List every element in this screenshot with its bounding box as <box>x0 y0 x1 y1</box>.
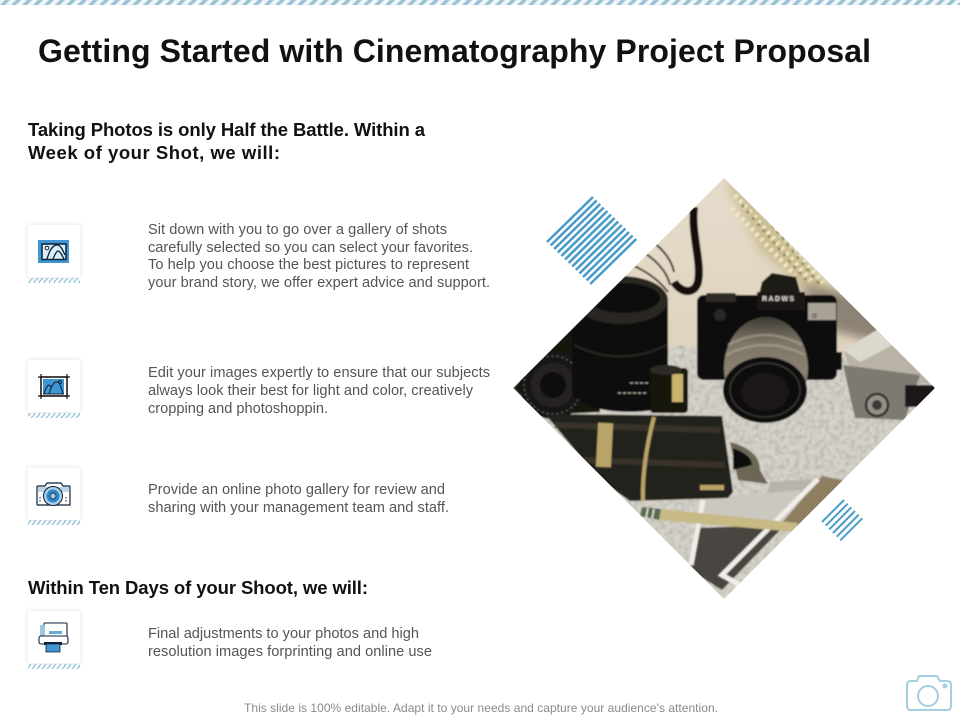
item 2 card with crop icon <box>28 360 80 418</box>
film canister <box>650 365 688 413</box>
photo prints <box>690 476 852 590</box>
item 2 text: Edit your images expertly to ensure that our subjects <box>148 365 490 381</box>
heading: first week <box>28 119 426 163</box>
grey shadow right top <box>799 280 884 343</box>
item 2 text: always look their best for light and color, creatively <box>148 383 474 399</box>
item 1 text: carefully selected so you can select your favorites. <box>148 240 473 256</box>
map surface <box>518 344 932 599</box>
dark left edge <box>513 328 601 414</box>
item 2 text <box>148 365 490 417</box>
striped diamond large <box>547 197 636 284</box>
item 4 text <box>148 626 432 660</box>
footer note: This slide is 100% editable. Adapt it to your needs and capture your audience's attention. <box>244 701 718 715</box>
item 3 card with camera icon <box>28 468 80 525</box>
icon: camera watermark <box>907 676 951 710</box>
pencil <box>640 507 798 532</box>
large upright lens <box>572 276 668 412</box>
heading: first week: Taking Photos is only Half the Battle. Within a <box>28 119 426 140</box>
item 1 text: To help you choose the best pictures to represent <box>148 257 469 273</box>
camera lens <box>723 317 808 423</box>
item 3 text <box>148 482 449 516</box>
icon: printer <box>39 623 68 652</box>
heading: first week: Week of your Shot, we will: <box>28 142 280 163</box>
striped diamond small <box>822 500 862 540</box>
black strap <box>674 207 699 291</box>
main camera body: α <box>812 311 817 320</box>
icon: crop frame <box>38 374 70 399</box>
main camera body: RADWS <box>762 296 794 303</box>
wicker backdrop <box>724 178 840 300</box>
item 3 text: Provide an online photo gallery for review and <box>148 482 445 498</box>
icon: picture <box>38 240 69 263</box>
item 3 text: sharing with your management team and staff. <box>148 500 449 516</box>
item 4 text: resolution images forprinting and online use <box>148 644 432 660</box>
small lens left <box>519 351 587 419</box>
main camera body <box>697 273 837 380</box>
item 1 text: Sit down with you to go over a gallery of shots <box>148 222 447 238</box>
item 2 text: cropping and photoshoppin. <box>148 401 328 417</box>
item 1 text: your brand story, we offer expert advice and support. <box>148 275 490 291</box>
heading: ten days: Within Ten Days of your Shoot, we will: <box>28 577 368 598</box>
drone <box>832 330 935 420</box>
icon: camera <box>37 483 70 506</box>
title: Getting Started with Cinematography Project Proposal <box>38 33 871 69</box>
item 1 text <box>148 222 490 291</box>
photo: diamond of cameras on a map <box>513 178 935 599</box>
item 1 card with gallery icon <box>28 225 80 283</box>
item 4 text: Final adjustments to your photos and high <box>148 626 419 642</box>
leather wallet <box>545 414 768 501</box>
item 4 card with printer icon <box>28 611 80 669</box>
top stripe band <box>0 0 960 5</box>
